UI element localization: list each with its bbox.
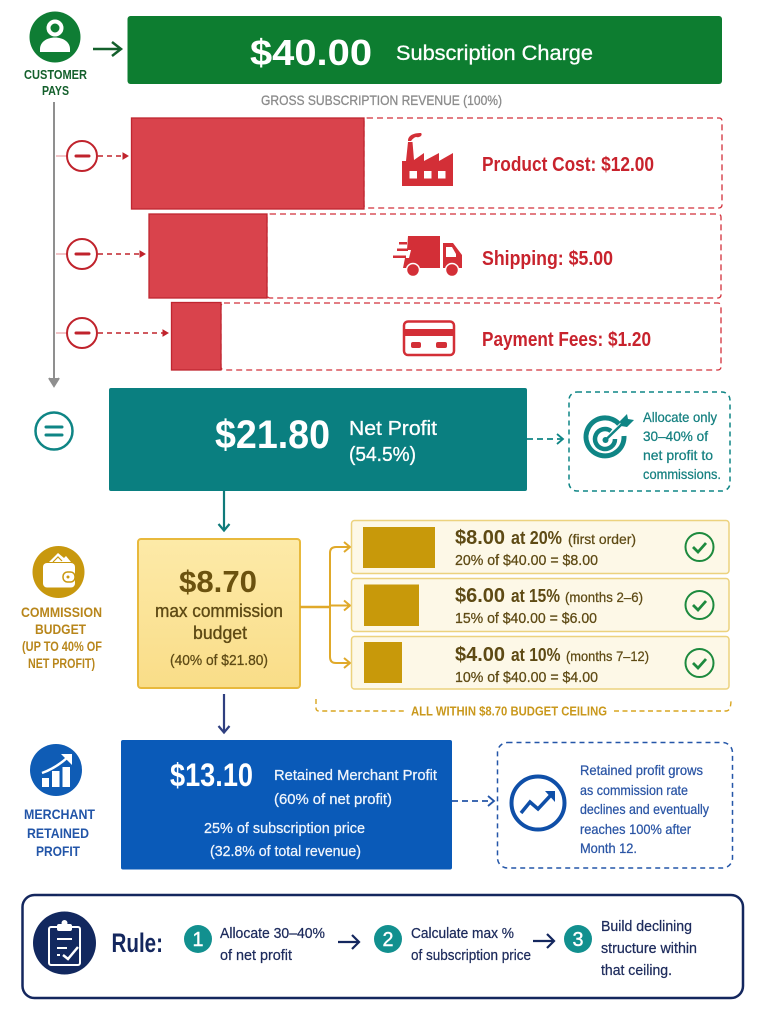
text: 15% tier: 15% of $40.00 = $6.00 bbox=[455, 611, 597, 627]
step 2: 2 bbox=[382, 929, 394, 951]
panel: max commission budget: budget bbox=[193, 623, 247, 643]
step 3: Build declining bbox=[601, 918, 692, 935]
label: merchant retained profit bbox=[24, 806, 95, 859]
text: 20% tier: (first order) bbox=[568, 531, 636, 547]
arrow: step 1 to 2 bbox=[338, 935, 359, 949]
icon: clipboard bbox=[33, 912, 96, 974]
bar: payment fees bbox=[172, 302, 221, 370]
text: allocate note: 30–40% of bbox=[643, 428, 708, 444]
step 3: 3 bbox=[572, 929, 584, 951]
label: commission budget: (UP TO 40% OF bbox=[22, 639, 102, 654]
panel: max commission budget bbox=[138, 539, 300, 688]
text: retained note: declines and eventually bbox=[580, 801, 709, 817]
arrow: customer to charge bbox=[93, 42, 121, 56]
text: 15% tier: at 15% bbox=[511, 586, 560, 606]
text: 20% tier: $8.00 bbox=[455, 527, 505, 549]
icon: minus bbox=[56, 318, 168, 348]
panel: max commission budget: $8.70 bbox=[179, 564, 257, 599]
callout: retained profit grows bbox=[498, 742, 732, 868]
icon: check bbox=[686, 649, 714, 677]
icon: factory bbox=[402, 133, 453, 186]
icon: customer bbox=[30, 12, 80, 62]
text: allocate note: Allocate only bbox=[643, 409, 717, 425]
label: commission budget: COMMISSION bbox=[21, 605, 102, 620]
icon: check bbox=[686, 591, 714, 619]
banner: subscription charge: Subscription Charge bbox=[396, 42, 593, 65]
text: 15% tier: (months 2–6) bbox=[565, 589, 643, 605]
commission budget label block bbox=[21, 546, 102, 671]
merchant retained label block bbox=[24, 744, 95, 859]
bar: 10% tier bbox=[364, 642, 402, 683]
icon: wallet bbox=[32, 546, 84, 598]
arrow: step 2 to 3 bbox=[533, 934, 554, 948]
text: retained note: reaches 100% after bbox=[580, 821, 691, 837]
text: 10% tier: (months 7–12) bbox=[566, 648, 649, 664]
banner: subscription charge: $40.00 bbox=[250, 32, 372, 73]
label: merchant retained profit: RETAINED bbox=[27, 825, 89, 841]
panel: net profit: $21.80 bbox=[215, 413, 330, 457]
text: 20% tier bbox=[455, 527, 636, 569]
text: 15% tier bbox=[455, 585, 643, 627]
label: customer pays bbox=[24, 68, 87, 98]
step 2 bbox=[374, 925, 531, 964]
bar: shipping bbox=[149, 214, 267, 298]
text: allocate note bbox=[643, 409, 721, 482]
panel: tier 10% bbox=[352, 636, 729, 689]
label: rule: Rule: bbox=[112, 928, 163, 958]
text: allocate note: commissions. bbox=[643, 466, 721, 482]
label: payment fees: Payment Fees: $1.20 bbox=[482, 329, 651, 351]
step 1 bbox=[184, 925, 325, 964]
panel: max commission budget: (40% of $21.80) bbox=[170, 653, 268, 669]
bar: product cost bbox=[132, 118, 364, 209]
icon: trend bbox=[512, 776, 564, 830]
label: commission budget: BUDGET bbox=[35, 622, 87, 637]
arrow: gray deduction flow line bbox=[49, 102, 59, 386]
arrows: budget to tiers bbox=[300, 542, 350, 668]
icon: credit card bbox=[404, 322, 454, 355]
icon: minus bbox=[56, 141, 128, 171]
bar: 15% tier bbox=[364, 584, 419, 626]
panel: retained merchant profit: Retained Merchant Profit bbox=[274, 767, 438, 784]
panel: rule bbox=[22, 895, 743, 998]
label: commission budget bbox=[21, 605, 102, 671]
panel: product cost bbox=[56, 118, 722, 209]
label: customer pays: PAYS bbox=[42, 84, 69, 98]
text: 10% tier bbox=[455, 644, 649, 686]
step 1: Allocate 30–40% bbox=[220, 925, 325, 942]
panel: max commission budget: max commission bbox=[155, 601, 283, 621]
step 3: that ceiling. bbox=[601, 962, 672, 979]
panel: net profit: (54.5%) bbox=[349, 444, 416, 466]
step 3 bbox=[564, 918, 697, 979]
label: shipping: Shipping: $5.00 bbox=[482, 248, 613, 270]
arrow: net profit to callout bbox=[527, 434, 563, 444]
step 1: of net profit bbox=[220, 947, 293, 964]
panel: tier 20% bbox=[352, 520, 729, 574]
label: customer pays: CUSTOMER bbox=[24, 68, 87, 82]
panel: retained merchant profit: $13.10 bbox=[170, 757, 253, 793]
label: commission budget: NET PROFIT) bbox=[28, 656, 95, 671]
icon: truck bbox=[393, 236, 462, 276]
text: 15% tier: $6.00 bbox=[455, 585, 505, 607]
step 2: of subscription price bbox=[411, 947, 531, 964]
text: retained note bbox=[580, 762, 709, 856]
bar: 20% tier bbox=[363, 527, 435, 568]
banner: subscription charge bbox=[128, 16, 722, 84]
step 2: Calculate max % bbox=[411, 925, 514, 942]
text: retained note: Retained profit grows bbox=[580, 762, 703, 778]
text: retained note: Month 12. bbox=[580, 840, 637, 856]
bracket: budget ceiling: ALL WITHIN $8.70 BUDGET CEILING bbox=[411, 704, 607, 718]
step 1: 1 bbox=[192, 929, 204, 951]
panel: net profit: Net Profit bbox=[349, 418, 437, 440]
arrow: budget to retained bbox=[218, 694, 230, 732]
arrow: net profit to budget bbox=[218, 491, 230, 530]
panel: shipping bbox=[56, 214, 721, 298]
text: retained note: as commission rate bbox=[580, 782, 688, 798]
text: 20% tier: at 20% bbox=[511, 528, 562, 548]
label: merchant retained profit: PROFIT bbox=[36, 843, 80, 859]
customer pays block bbox=[24, 12, 87, 98]
panel: retained merchant profit: (32.8% of total revenue) bbox=[210, 843, 361, 860]
bracket: budget ceiling bbox=[316, 699, 731, 718]
icon: equals bbox=[36, 412, 72, 450]
label: product cost: Product Cost: $12.00 bbox=[482, 154, 654, 176]
arrow: retained to callout bbox=[452, 796, 494, 806]
icon: minus bbox=[56, 239, 145, 269]
text: allocate note: net profit to bbox=[643, 447, 713, 463]
caption: gross revenue: GROSS SUBSCRIPTION REVENUE (100%) bbox=[261, 93, 502, 108]
icon: bar chart growth bbox=[30, 744, 82, 796]
panel: net profit bbox=[109, 388, 527, 491]
text: 20% tier: 20% of $40.00 = $8.00 bbox=[455, 553, 598, 569]
panel: payment fees bbox=[56, 302, 721, 370]
panel: retained merchant profit bbox=[121, 740, 452, 870]
icon: target bbox=[586, 414, 634, 456]
panel: tier 15% bbox=[352, 578, 729, 632]
panel: retained merchant profit: 25% of subscription price bbox=[204, 820, 365, 837]
label: merchant retained profit: MERCHANT bbox=[24, 806, 95, 822]
callout: allocate bbox=[569, 392, 730, 491]
step 3: structure within bbox=[601, 940, 697, 957]
text: 10% tier: 10% of $40.00 = $4.00 bbox=[455, 670, 598, 686]
icon: check bbox=[686, 533, 714, 561]
text: 10% tier: $4.00 bbox=[455, 644, 505, 666]
panel: retained merchant profit: (60% of net profit) bbox=[274, 791, 392, 808]
text: 10% tier: at 10% bbox=[511, 645, 560, 665]
